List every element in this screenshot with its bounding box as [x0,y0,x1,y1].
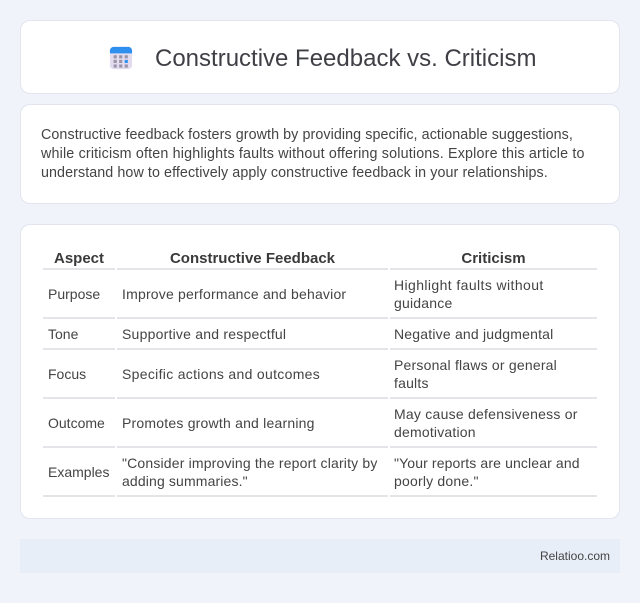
row: tone: Supportive and respectful [122,326,286,342]
row: examples [48,455,580,489]
row: outcome: demotivation [394,424,476,440]
row: focus: faults [394,375,429,391]
row: tone [48,326,553,342]
title: Constructive Feedback vs. Criticism [155,45,536,72]
row: purpose [48,277,544,311]
row: outcome: Promotes growth and learning [122,415,315,431]
intro text: Constructive feedback fosters growth by providing specific, actionable suggestions, [41,127,573,143]
intro text: understand how to effectively apply constructive feedback in your relationships. [41,165,548,181]
intro text [41,127,585,181]
header row: Aspect [54,250,104,267]
row: outcome: Outcome [48,415,105,431]
row: purpose: Highlight faults without [394,277,544,293]
intro text: while criticism often highlights faults without offering solutions. Explore this article to [41,146,585,162]
footer text: Relatioo.com [540,549,610,563]
row: purpose: Improve performance and behavior [122,286,346,302]
row: focus: Focus [48,366,86,382]
row: examples: Examples [48,464,109,480]
row: examples: adding summaries." [122,473,248,489]
row: focus: Personal flaws or general [394,357,557,373]
header row: Criticism [461,250,526,267]
row: examples: "Consider improving the report clarity by [122,455,377,471]
header row: Constructive Feedback [170,250,335,267]
panel: comparison table [20,224,620,519]
icon: calendar [110,46,132,70]
panel: introduction [20,104,620,204]
row: examples: "Your reports are unclear and [394,455,580,471]
row: focus: Specific actions and outcomes [122,366,320,382]
row: examples: poorly done." [394,473,479,489]
header row [54,250,526,267]
row: tone: Negative and judgmental [394,326,553,342]
row: tone: Tone [48,326,78,342]
row: focus [48,357,557,391]
row: purpose: guidance [394,295,452,311]
row: outcome [48,406,578,440]
footer bar [20,539,620,573]
panel: title card [20,20,620,94]
row: outcome: May cause defensiveness or [394,406,578,422]
row: purpose: Purpose [48,286,100,302]
